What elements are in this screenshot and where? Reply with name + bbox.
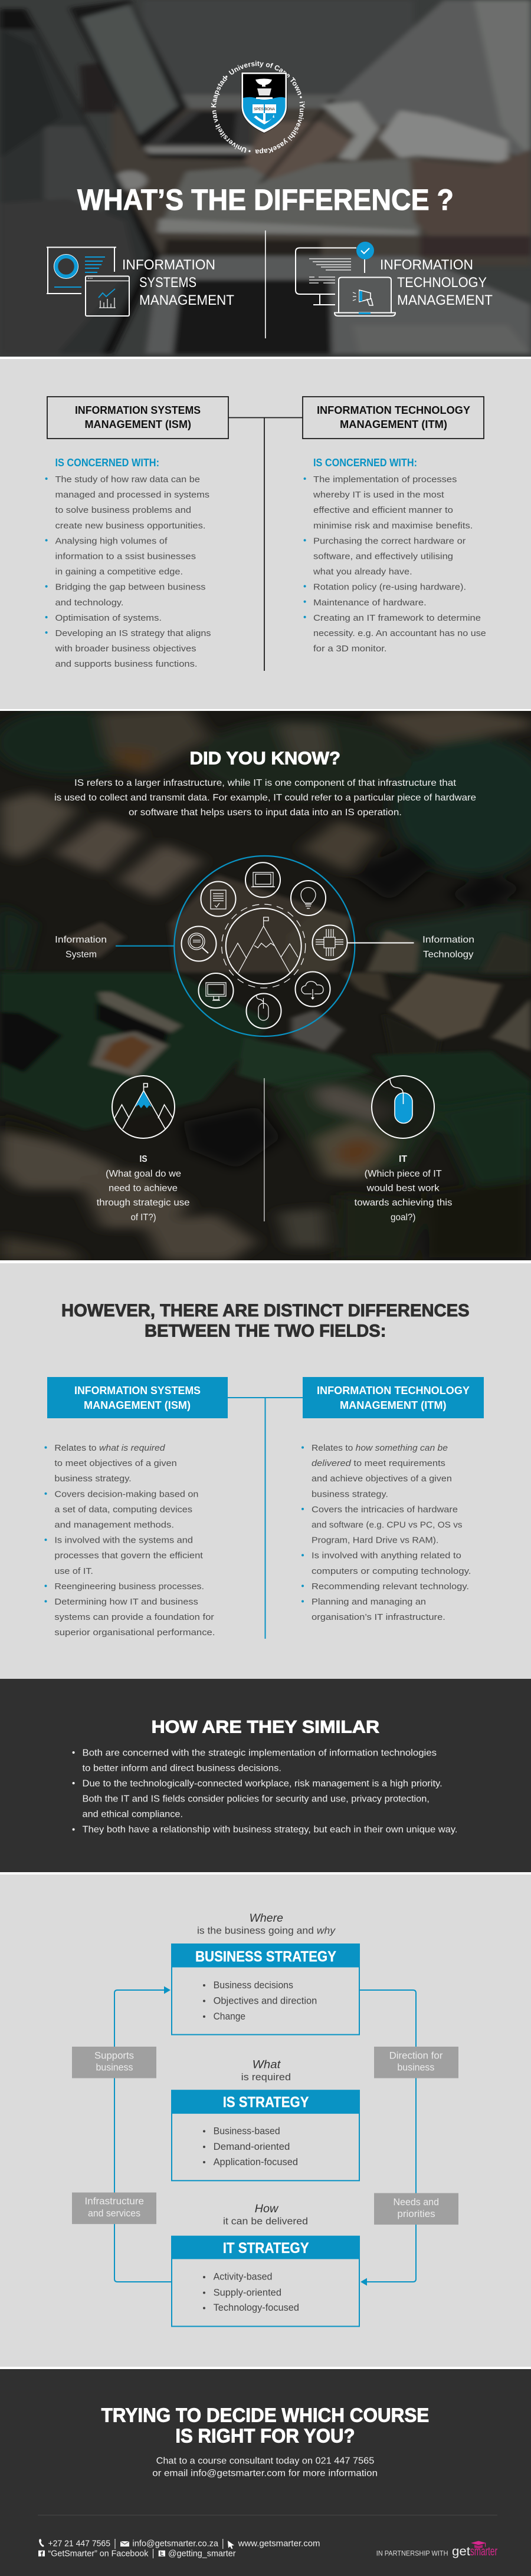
partner logo: getsmarter xyxy=(376,2541,497,2558)
icon: pink graduation cap xyxy=(471,2541,486,2549)
list: ISM differences: Covers decision-making based on xyxy=(54,1489,198,1499)
circular university name: Universiteit van Kaapstad xyxy=(211,75,247,153)
list: ITM differences: Covers the intricacies of hardware xyxy=(312,1504,458,1514)
label: supports business xyxy=(72,2047,156,2078)
circular university name: • xyxy=(225,75,228,78)
list: ISM differences: business strategy. xyxy=(54,1474,132,1484)
label: information systems management xyxy=(122,257,234,308)
panel: call to action and footer xyxy=(0,2369,531,2576)
list: similarities xyxy=(73,1748,458,1835)
text block: ISM concerns: in gaining a competitive edge. xyxy=(55,567,183,577)
question: how: it can be delivered xyxy=(223,2215,308,2227)
label: needs and priorities: Needs and xyxy=(393,2196,439,2208)
connector lines xyxy=(228,417,303,671)
card: IT strategy: Activity-based xyxy=(214,2271,273,2282)
arrow: IT strategy supports business strategy xyxy=(114,1987,171,2282)
list: ISM differences: a set of data, computing devices xyxy=(54,1504,192,1514)
text block: ISM concerns: managed and processed in systems xyxy=(55,490,209,500)
box: ITM xyxy=(303,1377,484,1418)
circuit board background photo xyxy=(0,707,531,1260)
partner logo: getsmarter: IN PARTNERSHIP WITH xyxy=(376,2549,448,2558)
caption: IS: of IT?) xyxy=(131,1213,156,1223)
text block: ITM concerns: Rotation policy (re-using hardware). xyxy=(313,582,466,592)
text block: ISM concerns: Bridging the gap between business xyxy=(55,582,205,592)
label: needs and priorities: priorities xyxy=(397,2208,435,2219)
circular university name: iYunivesithi yaseKapa xyxy=(255,101,304,153)
list: ISM differences xyxy=(45,1443,215,1638)
contact details: “GetSmarter” on Facebook xyxy=(48,2548,149,2558)
text block: ISM concerns xyxy=(45,457,211,669)
question: how xyxy=(223,2203,308,2227)
list: ITM differences: and achieve objectives of a given xyxy=(312,1474,452,1484)
box: ISM heading: MANAGEMENT (ISM) xyxy=(85,419,191,430)
heading: HOW ARE THEY SIMILAR xyxy=(152,1717,379,1737)
panel background xyxy=(0,1679,531,1872)
label: information technology management: TECHNOLOGY xyxy=(397,275,487,291)
box: ITM heading: INFORMATION TECHNOLOGY xyxy=(317,404,470,416)
intro paragraph: or software that helps users to input data into an IS operation. xyxy=(129,808,402,818)
label: information technology management xyxy=(380,257,493,308)
icon: desktop monitor xyxy=(198,973,234,1008)
text block: ITM concerns: Creating an IT framework to determine xyxy=(313,613,481,623)
contact prompt xyxy=(152,2456,378,2479)
card: IS strategy: Business-based xyxy=(214,2125,280,2136)
hero background photo xyxy=(0,0,531,357)
icon: information technology monitor and laptop xyxy=(296,242,395,316)
contact details: @getting_smarter xyxy=(168,2548,236,2558)
text block: ITM concerns: Purchasing the correct hardware or xyxy=(313,536,466,546)
list: ITM differences: Is involved with anything related to xyxy=(312,1551,461,1561)
card: business strategy: Change xyxy=(214,2011,245,2022)
label: information technology management: INFORMATION xyxy=(380,257,473,273)
text block: ISM concerns: IS CONCERNED WITH: xyxy=(55,457,159,469)
caption: IT: goal?) xyxy=(391,1213,415,1223)
divider xyxy=(265,230,266,338)
icon: twitter xyxy=(159,2551,165,2557)
label: information technology: Information xyxy=(422,935,474,945)
circular university name: • xyxy=(248,150,251,152)
icon: cloud download xyxy=(295,971,330,1007)
icon: checklist document xyxy=(201,882,236,916)
list: ITM differences: Recommending relevant technology. xyxy=(312,1582,469,1592)
contact details: info@getsmarter.co.za xyxy=(132,2538,219,2548)
label: direction for business xyxy=(374,2047,458,2078)
label: direction for business: Direction for xyxy=(389,2050,443,2061)
label: information technology management: MANAGEMENT xyxy=(397,292,493,308)
list: ITM differences: Planning and managing an xyxy=(312,1597,426,1607)
text block: ITM concerns: The implementation of processes xyxy=(313,475,457,485)
panel background xyxy=(0,1875,531,2367)
circular university name: • xyxy=(300,96,302,98)
intro paragraph xyxy=(54,778,476,818)
heading: HOWEVER, THERE ARE DISTINCT DIFFERENCES xyxy=(61,1301,470,1320)
box: ISM heading: INFORMATION SYSTEMS xyxy=(75,404,201,416)
caption: IS: need to achieve xyxy=(109,1184,178,1194)
heading: IS RIGHT FOR YOU? xyxy=(175,2425,355,2446)
caption: IT: (Which piece of IT xyxy=(365,1169,442,1179)
list: ITM differences: business strategy. xyxy=(312,1489,388,1499)
text block: ISM concerns: and technology. xyxy=(55,598,124,608)
icon: computer mouse xyxy=(247,994,281,1028)
list: ISM differences: and management methods. xyxy=(54,1520,174,1530)
list: ISM differences: superior organisational performance. xyxy=(54,1628,215,1638)
card: business strategy xyxy=(171,1943,360,2035)
heading: TRYING TO DECIDE WHICH COURSE xyxy=(101,2404,429,2426)
icon: mouse with blue body xyxy=(372,1076,434,1138)
label: information system: System xyxy=(65,950,97,960)
icon: laptop xyxy=(245,862,280,897)
panel background xyxy=(0,2369,531,2576)
list: similarities: They both have a relationship with business strategy, but each in their own unique way. xyxy=(83,1825,458,1835)
question: what: What xyxy=(253,2058,281,2071)
question: where: is the business going and why xyxy=(197,1925,336,1936)
text block: ITM concerns: effective and efficient manner to xyxy=(313,505,453,515)
list: ISM differences: Determining how IT and business xyxy=(54,1597,198,1607)
heading: did you know: DID YOU KNOW? xyxy=(190,748,340,769)
text block: ITM concerns: Maintenance of hardware. xyxy=(313,598,427,608)
caption: IS xyxy=(97,1154,190,1223)
box: ITM: INFORMATION TECHNOLOGY xyxy=(317,1385,470,1396)
label: information systems management: MANAGEMENT xyxy=(139,292,234,308)
text block: ISM concerns: information to a ssist businesses xyxy=(55,552,196,561)
list: ISM differences: use of IT. xyxy=(54,1566,93,1576)
label: infrastructure and services: and services xyxy=(88,2208,140,2219)
list: ITM differences: computers or computing technology. xyxy=(312,1566,471,1576)
heading: BETWEEN THE TWO FIELDS: xyxy=(145,1321,386,1340)
icon: microchip xyxy=(313,925,347,960)
text block: ISM concerns: The study of how raw data can be xyxy=(55,475,200,485)
text block: ISM concerns: to solve business problems and xyxy=(55,505,191,515)
card: IS strategy xyxy=(171,2090,360,2180)
list: ISM differences: processes that govern the efficient xyxy=(54,1551,204,1561)
caption: IS: (What goal do we xyxy=(106,1169,181,1179)
caption: IT: IT xyxy=(399,1154,407,1164)
shield: SPES BONA xyxy=(254,107,276,111)
icon: envelope xyxy=(120,2541,129,2547)
partner logo: getsmarter: get xyxy=(452,2545,470,2558)
card: business strategy: Objectives and direction xyxy=(214,1995,317,2007)
card: IS strategy: IS STRATEGY xyxy=(223,2094,309,2111)
card: IT strategy xyxy=(171,2236,360,2326)
card: IT strategy: IT STRATEGY xyxy=(223,2240,309,2257)
list: ISM differences: systems can provide a foundation for xyxy=(54,1612,214,1622)
caption: IT: would best work xyxy=(366,1184,440,1194)
text block: ISM concerns: create new business opportunities. xyxy=(55,521,205,531)
panel background xyxy=(0,1263,531,1679)
intro paragraph: IS refers to a larger infrastructure, while IT is one component of that infrastructure that xyxy=(74,778,457,788)
caption: IT xyxy=(354,1154,452,1223)
card: IT strategy: Technology-focused xyxy=(214,2302,299,2313)
circular university name xyxy=(211,61,304,153)
connector lines xyxy=(228,1398,303,1639)
panel: distinct differences xyxy=(0,1263,531,1679)
list: similarities: to better inform and direct business decisions. xyxy=(83,1763,281,1773)
partner logo: getsmarter: smarter xyxy=(470,2545,497,2558)
label: information technology: Technology xyxy=(423,950,473,960)
list: similarities: Due to the technologically-connected workplace, risk management is a high priority. xyxy=(83,1778,442,1788)
panel: strategy cycle xyxy=(0,1875,531,2367)
arrow: business strategy directs IT strategy xyxy=(360,1990,416,2286)
panel: did you know xyxy=(0,707,531,1260)
question: where: Where xyxy=(249,1912,283,1925)
icon: magnifying glass xyxy=(182,927,216,961)
box: ITM heading xyxy=(303,397,484,439)
list: similarities: and ethical compliance. xyxy=(83,1810,183,1820)
contact prompt: or email info@getsmarter.com for more information xyxy=(152,2469,378,2479)
icon: facebook xyxy=(38,2551,45,2557)
text block: ITM concerns: necessity. e.g. An accountant has no use xyxy=(313,628,486,638)
text block: ITM concerns: IS CONCERNED WITH: xyxy=(313,457,417,469)
icon: light bulb xyxy=(291,881,326,915)
IT goal: mouse icon and caption xyxy=(354,1076,452,1223)
logo: University of Cape Town crest xyxy=(211,61,304,153)
text block: ISM concerns: Optimisation of systems. xyxy=(55,613,162,623)
diagram: IS containing IT icons xyxy=(174,856,355,1036)
label: supports business: Supports xyxy=(94,2050,134,2061)
question: how: How xyxy=(255,2203,279,2215)
card: business strategy: BUSINESS STRATEGY xyxy=(195,1948,336,1965)
list: similarities: Both the IT and IS fields consider policies for security and use, privacy protection, xyxy=(83,1794,430,1804)
list: ITM differences: and software (e.g. CPU vs PC, OS vs xyxy=(312,1520,463,1530)
box: ITM: MANAGEMENT (ITM) xyxy=(340,1399,446,1411)
card: business strategy: Business decisions xyxy=(214,1979,293,1991)
text block: ITM concerns xyxy=(304,457,486,654)
label: supports business: business xyxy=(96,2062,133,2073)
contact details: +27 21 447 7565 xyxy=(48,2538,110,2548)
question: what xyxy=(241,2058,291,2083)
shield xyxy=(241,72,287,133)
intro paragraph: is used to collect and transmit data. For example, IT could refer to a particular piece of hardware xyxy=(54,793,476,803)
text block: ISM concerns: Developing an IS strategy that aligns xyxy=(55,628,211,638)
list: ISM differences: Relates to what is required xyxy=(54,1443,165,1453)
box: ISM: INFORMATION SYSTEMS xyxy=(74,1385,201,1396)
contact prompt: Chat to a course consultant today on 021 447 7565 xyxy=(156,2456,374,2466)
text block: ISM concerns: and supports business functions. xyxy=(55,659,197,669)
heading xyxy=(101,2404,429,2446)
label: direction for business: business xyxy=(397,2062,434,2073)
list: ITM differences: Program, Hard Drive vs RAM). xyxy=(312,1536,438,1546)
text block: ISM concerns: Analysing high volumes of xyxy=(55,536,168,546)
card: IT strategy: Supply-oriented xyxy=(214,2287,281,2298)
box: ISM heading xyxy=(47,397,228,439)
text block: ITM concerns: what you already have. xyxy=(313,567,412,577)
panel: hero xyxy=(0,0,531,357)
list: ITM differences: organisation’s IT infrastructure. xyxy=(312,1612,445,1622)
panel: concerned with xyxy=(0,359,531,709)
icon: cursor xyxy=(228,2541,234,2549)
caption: IS: IS xyxy=(139,1154,148,1164)
label: information systems management: SYSTEMS xyxy=(139,275,196,291)
list: ITM differences: delivered to meet requirements xyxy=(312,1458,445,1468)
card: IS strategy: Application-focused xyxy=(214,2156,298,2167)
panel: how are they similar xyxy=(0,1679,531,1872)
icon: phone xyxy=(39,2539,44,2547)
card: IS strategy: Demand-oriented xyxy=(214,2141,290,2152)
list: ITM differences xyxy=(301,1443,471,1622)
question: where xyxy=(197,1912,336,1936)
heading xyxy=(61,1301,470,1340)
icon: information systems dashboard xyxy=(47,248,129,316)
label: information systems management: INFORMATION xyxy=(122,257,215,273)
caption: IT: towards achieving this xyxy=(354,1198,452,1208)
box: ISM: MANAGEMENT (ISM) xyxy=(84,1399,191,1411)
text block: ITM concerns: minimise risk and maximise benefits. xyxy=(313,521,473,531)
label: information system xyxy=(55,935,175,960)
title: WHAT’S THE DIFFERENCE ? xyxy=(77,183,454,216)
contact details xyxy=(38,2538,320,2558)
panel background xyxy=(0,359,531,709)
centre icon: mountain xyxy=(222,904,306,988)
box: ITM heading: MANAGEMENT (ITM) xyxy=(340,419,447,430)
label: needs and priorities xyxy=(374,2193,458,2225)
icon: mountain with blue peak xyxy=(112,1076,175,1138)
list: similarities: Both are concerned with the strategic implementation of information technologies xyxy=(83,1748,437,1758)
IS goal: mountain icon and caption xyxy=(97,1076,190,1223)
text block: ITM concerns: software, and effectively utilising xyxy=(313,552,453,561)
box: ISM xyxy=(47,1377,228,1418)
label: information technology xyxy=(347,935,474,960)
list: ISM differences: Reengineering business processes. xyxy=(54,1582,204,1592)
text block: ITM concerns: whereby IT is used in the most xyxy=(313,490,445,500)
list: ISM differences: Is involved with the systems and xyxy=(54,1536,193,1546)
contact details: www.getsmarter.com xyxy=(238,2538,320,2548)
list: ISM differences: to meet objectives of a given xyxy=(54,1458,177,1468)
question: what: is required xyxy=(241,2071,291,2083)
circular university name: University of Cape Town xyxy=(229,61,301,95)
label: infrastructure and services: Infrastructure xyxy=(85,2196,144,2207)
label: infrastructure and services xyxy=(72,2192,156,2224)
list: ITM differences: Relates to how something can be xyxy=(312,1443,448,1453)
caption: IS: through strategic use xyxy=(97,1198,190,1208)
label: information system: Information xyxy=(55,935,107,945)
text block: ITM concerns: for a 3D monitor. xyxy=(313,644,387,654)
text block: ISM concerns: with broader business objectives xyxy=(54,644,196,654)
